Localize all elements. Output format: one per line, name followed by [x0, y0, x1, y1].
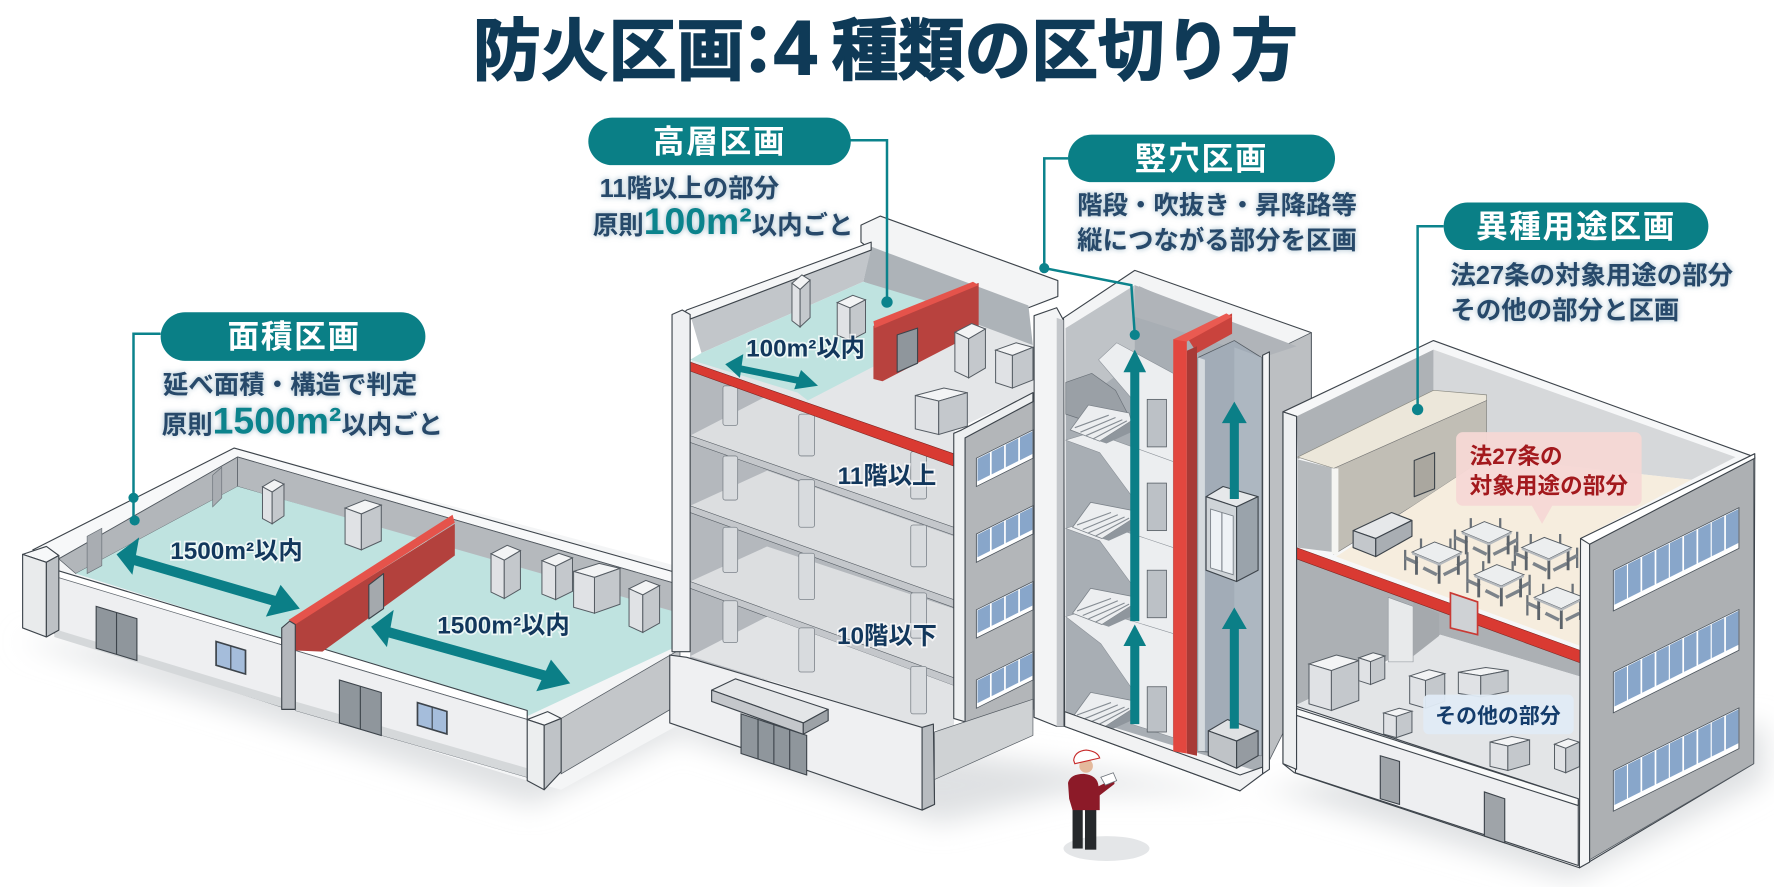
top stair rubble	[1066, 373, 1131, 421]
ground shadow	[16, 639, 1765, 880]
title: 4	[774, 6, 817, 92]
callout: 異種用途区画: 異種用途区画	[1476, 209, 1676, 245]
right corner wall strip	[1263, 352, 1269, 774]
parapet	[861, 216, 1058, 308]
arrow: lift lower	[1222, 608, 1247, 729]
callout: 竪穴区画: 竪穴区画	[1135, 141, 1268, 177]
lower wall	[1294, 559, 1581, 706]
callout: 高層区画: 高層区画	[653, 124, 786, 160]
center pilaster	[282, 621, 295, 709]
stair flights	[1070, 405, 1134, 731]
callout: 面積区画: 原則1500m²以内ごと	[162, 399, 443, 441]
front doors	[1380, 756, 1505, 843]
title: ：	[724, 15, 792, 90]
front wall right	[295, 640, 527, 720]
label: other part: その他の部分	[1435, 705, 1561, 728]
right side wall	[1269, 333, 1311, 760]
callout: 面積区画: 面積区画	[227, 318, 361, 354]
entrance doors and windows	[96, 606, 447, 736]
dimension arrow	[725, 354, 818, 389]
front wall left	[57, 570, 282, 645]
callout: 異種用途区画: その他の部分と区画	[1450, 297, 1679, 325]
roof floor light	[690, 282, 1033, 454]
left outer strip	[1283, 412, 1297, 769]
canopy	[712, 679, 828, 734]
area label right: 1500m²以内	[437, 613, 570, 640]
columns	[723, 386, 927, 714]
columns and storage boxes	[262, 480, 660, 632]
label: other part	[1423, 695, 1574, 734]
callout: target use: 対象用途の部分	[1470, 473, 1628, 498]
callout: target use	[1456, 432, 1642, 524]
upper door	[1414, 453, 1435, 497]
windows	[976, 430, 1033, 708]
left corner pilaster	[23, 546, 59, 562]
arrow: stair long	[1123, 350, 1146, 621]
teal zone	[690, 282, 927, 401]
upper floor beige	[1336, 457, 1691, 646]
elevator shaft	[1198, 341, 1261, 756]
panel: 高層区画 building	[670, 216, 1058, 810]
entrance doors	[741, 714, 807, 775]
red partition	[873, 283, 979, 381]
base wall front	[670, 655, 935, 810]
dimension arrow right	[371, 610, 570, 691]
partition door	[897, 328, 918, 372]
counter box	[1353, 513, 1412, 557]
title	[473, 6, 1298, 92]
connector	[1418, 226, 1444, 408]
red beam	[1297, 548, 1581, 663]
left pilaster	[1034, 308, 1063, 726]
pill heading	[1068, 135, 1335, 182]
teal floor	[76, 486, 680, 716]
callout: 竪穴区画: 縦につながる部分を区画	[1077, 226, 1357, 255]
title: 防火区画	[473, 15, 744, 90]
stair doors	[1147, 399, 1166, 732]
right back wall	[1433, 350, 1736, 480]
beige wall	[1334, 401, 1487, 554]
fire door	[1450, 593, 1478, 635]
right corner pilaster	[561, 649, 680, 774]
right side wall	[965, 402, 1033, 738]
interior lower back wall	[690, 369, 954, 724]
windows	[1613, 508, 1739, 811]
left back wall	[1297, 350, 1433, 459]
dimension arrow left	[117, 537, 300, 617]
title: 種類の区切り方	[832, 15, 1298, 90]
pill heading	[1444, 203, 1708, 250]
pill heading	[588, 118, 851, 165]
rooftop boxes	[792, 275, 1033, 434]
back wall	[863, 247, 1033, 346]
callout: target use: 法27条の	[1470, 444, 1563, 469]
stair landings and walls	[1066, 343, 1173, 738]
red beam	[690, 362, 954, 466]
fire wall red	[1173, 313, 1232, 756]
connector	[1044, 158, 1135, 335]
area label left: 1500m²以内	[170, 538, 303, 565]
lower storage boxes	[1309, 653, 1579, 773]
connector	[134, 334, 161, 520]
callout: 竪穴区画	[1039, 135, 1357, 340]
label 11階以上: 11階以上	[838, 463, 936, 490]
lower floor	[1294, 635, 1581, 806]
callout: 高層区画	[588, 118, 893, 308]
outer wall	[1063, 270, 1311, 791]
pill heading	[161, 312, 425, 361]
panel: 異種用途区画 building	[1283, 341, 1755, 868]
counterweight base	[1208, 720, 1258, 768]
floor strip	[1065, 712, 1263, 791]
callout: 異種用途区画	[1412, 203, 1734, 415]
connector	[849, 140, 887, 302]
callout: 高層区画: 原則100m²以内ごと	[593, 200, 853, 242]
description: 11階以上の部分	[600, 175, 780, 203]
elevator car	[1206, 486, 1258, 582]
slabs	[690, 397, 954, 733]
small doors on back walls	[213, 467, 222, 507]
panel: 竪穴区画 building	[1034, 270, 1311, 791]
description: 階段・吹抜き・昇降路等	[1077, 192, 1357, 220]
tables and chairs	[1405, 518, 1590, 629]
fire wall red	[295, 524, 455, 652]
front wall	[1295, 706, 1578, 866]
left pilaster	[672, 310, 690, 652]
pillar	[1388, 597, 1413, 662]
callout: 面積区画	[128, 312, 443, 526]
shaft interior	[1066, 286, 1263, 773]
upper beige ceiling	[1298, 390, 1487, 468]
panel: 面積区画 building	[23, 448, 680, 790]
right side wall	[1590, 457, 1754, 860]
description: 延べ面積・構造で判定	[163, 372, 417, 400]
label 100m²: 100m²以内	[746, 335, 865, 362]
label 10階以下: 10階以下	[837, 623, 937, 650]
person inspector	[1063, 750, 1149, 861]
shell	[1283, 341, 1755, 868]
door in fire wall	[369, 574, 384, 619]
arrow: lift upper	[1222, 402, 1247, 499]
arrow: stair short	[1123, 625, 1146, 724]
description: 法27条の対象用途の部分	[1450, 262, 1734, 290]
